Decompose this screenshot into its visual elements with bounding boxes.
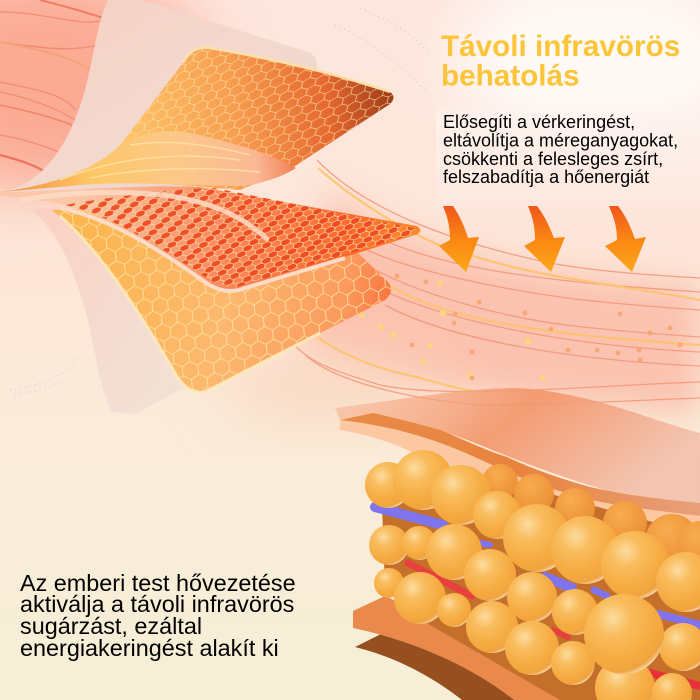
caption text: sugárzást, ezáltal (20, 613, 202, 639)
heat sparks (359, 274, 682, 381)
skin layer: translucent upper tissue (335, 388, 700, 510)
description text: Elősegíti a vérkeringést, (443, 112, 635, 132)
blood vessels: blue veins and red arteries (375, 507, 700, 686)
main heading: behatolás (441, 60, 580, 92)
icon: arrow 2 (524, 206, 565, 272)
description panel backdrop (436, 100, 700, 206)
caption text: energiakeringést alakít ki (20, 635, 279, 661)
dotted sparkle lines (10, 8, 430, 395)
patch: folded leaf where the layers meet (0, 131, 296, 192)
heat flow lines: right side (290, 160, 700, 405)
heat flow lines: upper left (0, 0, 110, 172)
main heading: Távoli infravörös (441, 30, 680, 63)
skin layer: bottom brown membrane (355, 632, 545, 700)
skin layer: bottom orange membrane (353, 596, 610, 700)
fat cells: back row (382, 464, 700, 700)
description text: felszabadítja a hőenergiát (443, 167, 649, 187)
icon: arrow 1 (439, 206, 479, 272)
description text: eltávolítja a méreganyagokat, (443, 130, 678, 150)
caption text: aktiválja a távoli infravörös (20, 591, 294, 617)
patch: upper orange layer with hexagon mesh (120, 48, 394, 190)
patch: middle red-orange layer with dense hexagon cells (0, 186, 420, 291)
patch: lower orange layer with hexagon mesh (52, 205, 391, 392)
caption text: Az emberi test hővezetése (20, 570, 296, 596)
skin layer: orange band (340, 413, 700, 516)
patch: lower white film (30, 205, 186, 414)
fat cells: foreground spheres (365, 450, 700, 700)
skin layer: pale band edge (340, 420, 700, 531)
icon: arrow 3 (605, 206, 646, 272)
patch: back white film (0, 0, 317, 200)
description text: csökkenti a felesleges zsírt, (443, 149, 663, 169)
